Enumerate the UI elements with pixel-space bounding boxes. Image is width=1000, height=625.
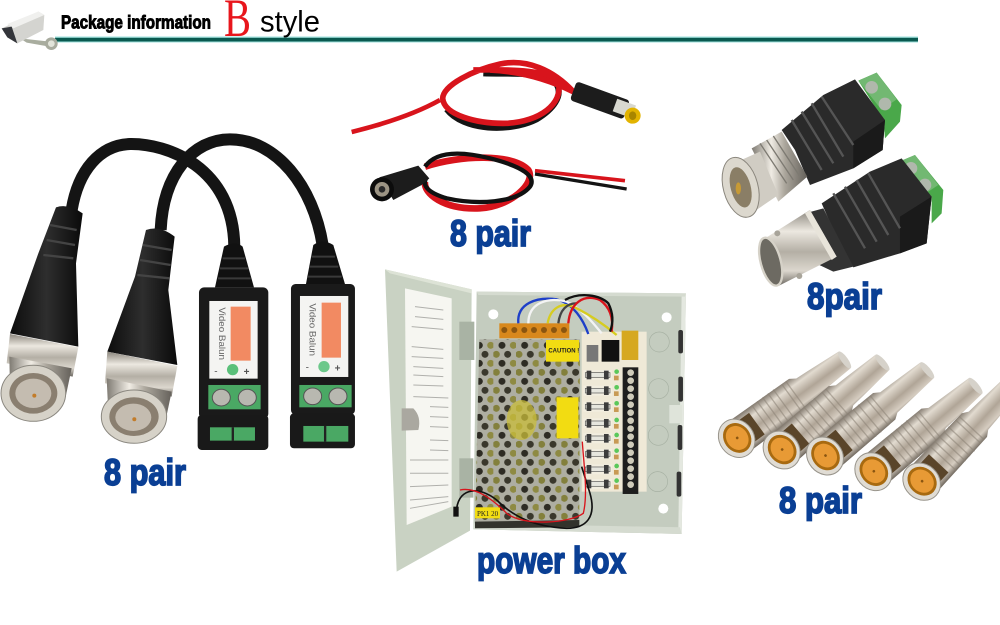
right bnc plug [101,228,177,443]
female pigtail [370,154,627,208]
header [2,0,918,50]
label: adapters quantity: 8pair [807,276,882,317]
male adapter [716,73,902,221]
balun 2 [290,242,355,448]
connector 4 [847,368,991,498]
icon: security camera [2,12,58,50]
heading: package information: Package information [61,12,211,32]
product: cctv power box [385,269,686,572]
balun 2: + [335,363,341,374]
label: pigtails quantity: 8 pair [450,213,531,254]
left bnc plug [1,206,83,421]
power supply unit: PK1 20 [477,510,499,518]
female adapter [755,155,943,288]
heading: style: style [260,6,320,38]
connector 1 [711,342,859,465]
header rule [55,36,918,42]
balun 1: - [214,366,218,377]
balun 2: - [306,363,309,374]
cables [72,139,323,247]
connector 3 [799,353,943,482]
connector 2 [755,345,898,476]
power supply unit [475,323,580,528]
product: bnc crimp connectors [711,342,1000,508]
power supply unit: CAUTION ! [548,348,579,354]
product: dc power pigtails [352,63,641,208]
wires [453,295,617,528]
product: bnc terminal adapters [716,73,943,288]
product: video baluns [1,139,355,450]
balun 1 [198,243,268,450]
balun 1: + [244,367,250,378]
cabinet [473,292,686,534]
balun 1: Video Balun [217,307,227,360]
label: power box: power box [477,540,626,581]
connector 5 [895,368,1000,508]
fuse board [582,331,647,494]
label: baluns quantity: 8 pair [104,452,186,493]
door [385,269,474,572]
balun 2: Video Balun [308,303,318,356]
male pigtail [352,63,641,132]
label: crimp connectors quantity: 8 pair [779,480,862,521]
